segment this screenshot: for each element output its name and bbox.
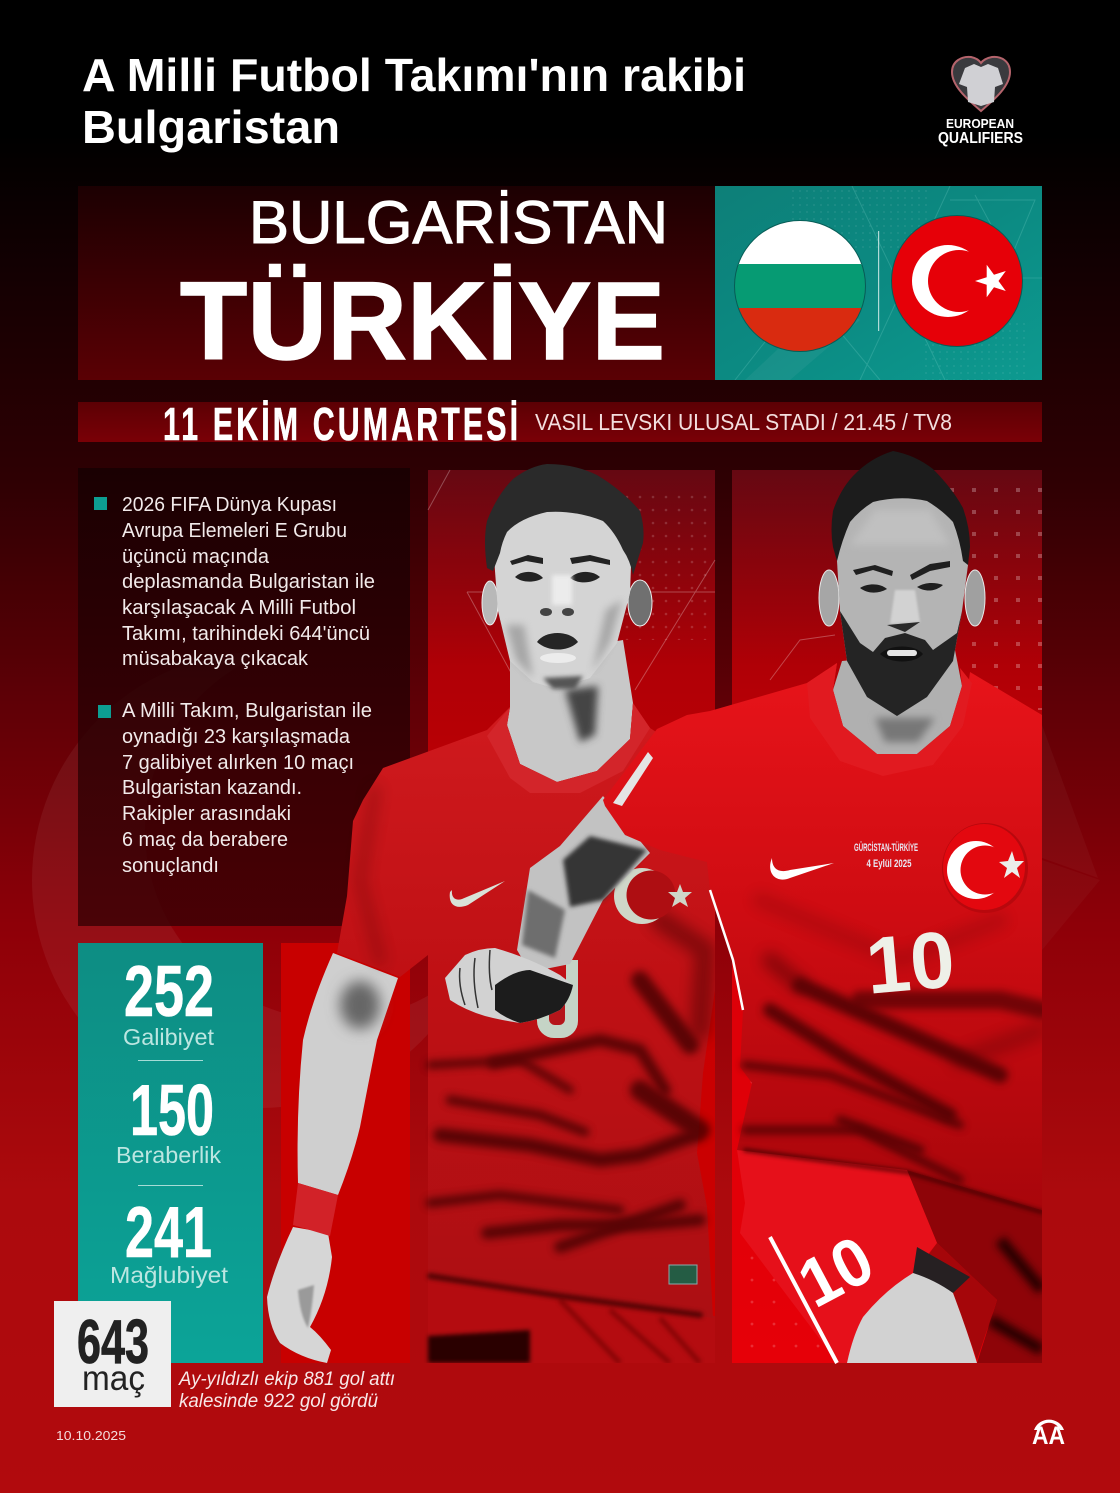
collar: [807, 663, 972, 776]
commemorative text: 4 Eylül 2025: [866, 858, 912, 870]
badge: crescent and star: [942, 823, 1028, 913]
text block 1: [122, 494, 375, 670]
text block 2: sonuçlandı: [122, 855, 219, 877]
ears: [819, 570, 839, 626]
shirt folds: [745, 900, 1042, 1212]
tattooed arm and fist: [445, 796, 650, 1023]
stat: wins: Galibiyet: [123, 1024, 215, 1050]
icon: heart with shirt: [952, 57, 1010, 111]
bullet 2: [98, 705, 111, 718]
stat: draws: 150: [130, 1071, 214, 1151]
shirt swoosh: [770, 858, 834, 880]
leg: [847, 1273, 977, 1363]
shorts stripe: [770, 1237, 837, 1363]
bullet 1: [94, 497, 107, 510]
stat: losses: Mağlubiyet: [110, 1262, 229, 1288]
goals note: Ay-yıldızlı ekip 881 gol attı: [178, 1369, 395, 1390]
match date: 11 EKİM CUMARTESİ: [163, 400, 518, 451]
patch: [669, 1265, 697, 1284]
hand: [267, 1227, 332, 1363]
text block 1: deplasmanda Bulgaristan ile: [122, 571, 375, 593]
shirt number 10: 10: [863, 914, 958, 1011]
logo: European Qualifiers: QUALIFIERS: [938, 130, 1023, 147]
panel: statistics: [78, 943, 263, 1363]
text block 2: Bulgaristan kazandı.: [122, 777, 302, 799]
neck: [507, 640, 633, 782]
text block 2: oynadığı 23 karşılaşmada: [122, 726, 351, 748]
shorts rim: [917, 1243, 997, 1360]
hair: [832, 451, 970, 565]
title: A Milli Futbol Takımı'nın rakibi: [82, 49, 746, 101]
shirt folds: [360, 790, 705, 1315]
fist: [445, 948, 573, 1023]
stat: draws: [116, 1071, 222, 1168]
text block 2: Rakipler arasındaki: [122, 803, 291, 825]
player: left (grayscale head and arm, red shirt): [267, 464, 715, 1363]
shirt: [337, 703, 715, 1318]
neck: [833, 650, 962, 754]
collar: [487, 703, 650, 793]
commemorative text: GÜRCİSTAN-TÜRKİYE: [854, 841, 918, 854]
logo: European Qualifiers: [938, 57, 1023, 147]
venue and time: VASIL LEVSKI ULUSAL STADI / 21.45 / TV8: [535, 409, 952, 435]
date: 10.10.2025: [56, 1428, 126, 1443]
stat: losses: [110, 1193, 229, 1288]
flag: Türkiye: [891, 215, 1023, 347]
shirt stripe: [710, 890, 743, 1010]
hair: [485, 464, 644, 575]
left arm: [267, 953, 398, 1363]
ears: [482, 581, 498, 625]
text block 2: 6 maç da berabere: [122, 829, 288, 851]
panel: red backgrounds for players: [281, 470, 1042, 1363]
stat: losses: 241: [125, 1193, 212, 1273]
match info bar: [78, 400, 1042, 451]
wristband: [293, 1183, 338, 1236]
shirt swoosh: [450, 881, 505, 907]
title: [82, 49, 746, 153]
goals note: [178, 1369, 395, 1412]
player: right (grayscale head and arm, red shirt): [445, 451, 1042, 1363]
goals note: kalesinde 922 gol gördü: [179, 1391, 378, 1412]
text block 2: A Milli Takım, Bulgaristan ile: [122, 700, 372, 722]
team: Bulgaristan: BULGARİSTAN: [249, 189, 668, 256]
brows and eyes: [510, 555, 610, 582]
nose and mouth: [537, 575, 578, 663]
panel: text: [78, 468, 410, 926]
title: Bulgaristan: [82, 101, 340, 153]
text block 1: Avrupa Elemeleri E Grubu: [122, 520, 347, 542]
shirt number: [537, 960, 578, 1038]
text block 1: 2026 FIFA Dünya Kupası: [122, 494, 337, 516]
text block 1: karşılaşacak A Milli Futbol: [122, 597, 356, 619]
brows and eyes: [853, 561, 950, 593]
stat: wins: [123, 952, 215, 1050]
panel: flags: [715, 186, 1042, 380]
beard: [840, 611, 962, 716]
callout: 643 matches: 643: [77, 1308, 149, 1377]
shirt: [603, 663, 1042, 1210]
text block 1: Takımı, tarihindeki 644'üncü: [122, 623, 370, 645]
shorts waistband: [913, 1247, 970, 1293]
text block 1: üçüncü maçında: [122, 546, 270, 568]
text block 2: [122, 700, 372, 877]
shorts: [428, 1278, 715, 1363]
head: [493, 505, 632, 689]
callout: 643 matches: [54, 1301, 171, 1407]
stat: wins: 252: [124, 952, 214, 1032]
nose and mouth: [880, 590, 923, 662]
shorts: [737, 1150, 937, 1363]
team: Türkiye: TÜRKİYE: [180, 260, 665, 383]
shorts number: 10: [786, 1221, 886, 1322]
panel: match teams: [78, 186, 715, 383]
stat: draws: Beraberlik: [116, 1142, 222, 1168]
callout: 643 matches: maç: [82, 1359, 145, 1398]
logo: Anadolu Agency: AA: [1032, 1422, 1065, 1450]
text block 2: 7 galibiyet alırken 10 maçı: [122, 752, 354, 774]
commemorative text: [854, 841, 918, 870]
shorts dark side: [907, 1170, 1042, 1363]
text block 1: müsabakaya çıkacak: [122, 648, 309, 670]
head: [837, 490, 968, 715]
logo: European Qualifiers: EUROPEAN: [946, 117, 1014, 131]
background: faint crescent and star: [0, 640, 1100, 1120]
shirt crescent and star: [614, 868, 692, 924]
flag: Bulgaria: [734, 220, 866, 352]
sleeve patch: [613, 752, 653, 806]
